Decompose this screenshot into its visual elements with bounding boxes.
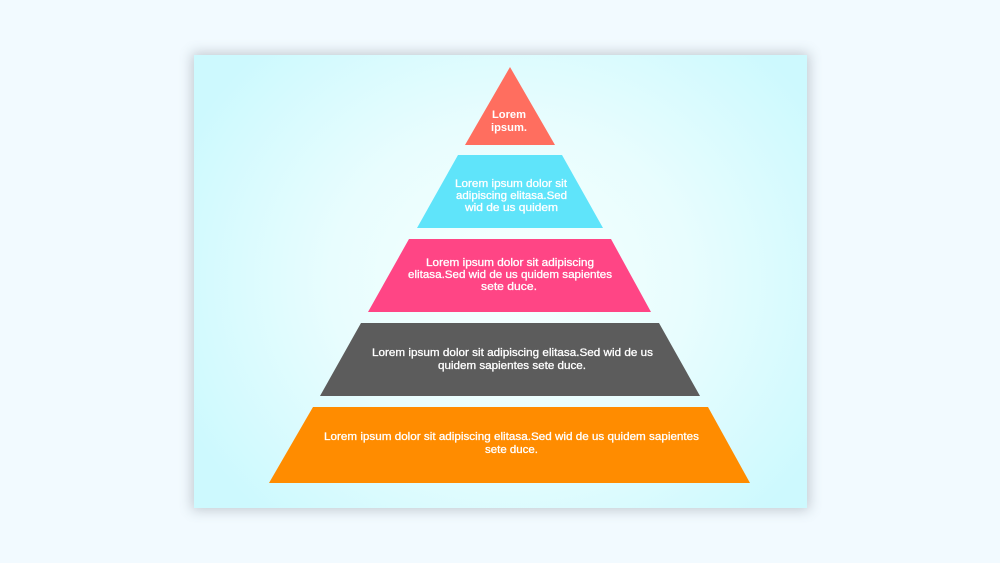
tier 5: orange base band [269, 407, 750, 483]
tier 5: orange base band: Lorem ipsum dolor sit adipiscing elitasa.Sed wid de us quidem sapientes [324, 431, 700, 443]
tier 4: dark grey band [320, 323, 700, 396]
tier 3: pink band [368, 239, 651, 312]
tier 1: coral top triangle: Lorem [492, 109, 526, 121]
panel: background card [194, 55, 807, 508]
tier 5: orange base band: sete duce. [485, 444, 538, 456]
tier 3: pink band: elitasa.Sed wid de us quidem sapientes [408, 269, 613, 281]
tier 3: pink band: sete duce. [481, 281, 537, 293]
tier 2: cyan band: Lorem ipsum dolor sit [455, 178, 567, 190]
tier 4: dark grey band: quidem sapientes sete duce. [438, 360, 586, 372]
tier 4: dark grey band: Lorem ipsum dolor sit adipiscing elitasa.Sed wid de us [372, 347, 654, 359]
tier 2: cyan band [417, 155, 603, 228]
tier 3: pink band: Lorem ipsum dolor sit adipiscing [426, 257, 594, 269]
tier 2: cyan band: wid de us quidem [464, 202, 558, 214]
tier 1: coral top triangle: ipsum. [491, 122, 527, 134]
tier 1: coral top triangle [465, 67, 555, 145]
tier 2: cyan band: adipiscing elitasa.Sed [456, 190, 567, 202]
